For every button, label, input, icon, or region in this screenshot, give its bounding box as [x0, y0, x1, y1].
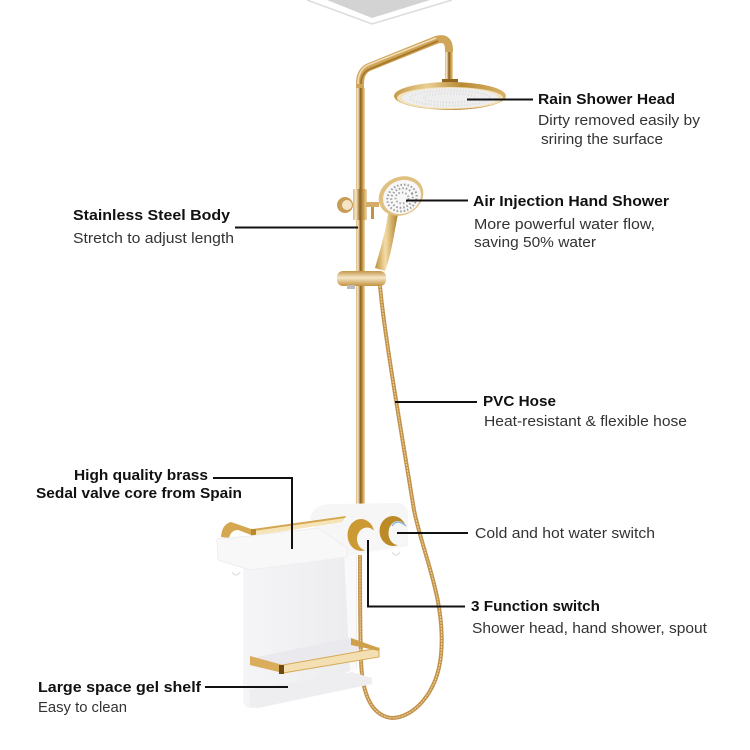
hook details: [232, 552, 400, 575]
white backplate and gel shelf: [243, 552, 372, 708]
valve housing: [310, 503, 408, 558]
callout: air injection hand shower: More powerful water flow,: [474, 216, 655, 233]
hot and cold switches: [348, 516, 408, 551]
callout: rain shower head: sriring the surface: [541, 131, 663, 148]
callout: air injection hand shower: Air Injection Hand Shower: [473, 193, 669, 210]
callout: air injection hand shower: saving 50% water: [474, 234, 596, 251]
callout: PVC hose: Heat-resistant & flexible hose: [484, 413, 687, 430]
air injection hand shower: [372, 169, 430, 271]
callout: cold and hot water switch: Cold and hot water switch: [475, 525, 655, 542]
callout: 3 function switch: 3 Function switch: [471, 598, 600, 615]
upper gold rail: [221, 516, 346, 538]
callout: PVC hose: PVC Hose: [483, 393, 556, 410]
callout: rain shower head: Dirty removed easily by: [538, 112, 701, 129]
decorative ceiling panel: [307, 0, 452, 24]
flexible hose: [360, 286, 442, 718]
callout: PVC hose: [395, 393, 687, 430]
callout: stainless steel body: Stainless Steel Body: [73, 207, 231, 224]
rain shower head: [394, 79, 506, 110]
callout: high quality brass: High quality brass: [74, 467, 208, 484]
callout: large space gel shelf: Easy to clean: [38, 699, 127, 716]
shower riser pipe with top arm: [356, 38, 453, 508]
callout: rain shower head: [467, 91, 701, 148]
callout: air injection hand shower: [406, 193, 669, 251]
hand shower holder: [337, 271, 386, 289]
callout: high quality brass: [36, 467, 292, 549]
callout: rain shower head: Rain Shower Head: [538, 91, 675, 108]
callout: 3 function switch: Shower head, hand shower, spout: [472, 620, 708, 637]
lower gold towel rail: [250, 638, 379, 674]
callout: high quality brass: Sedal valve core from Spain: [36, 485, 242, 502]
callout: 3 function switch: [368, 540, 708, 637]
sliding bracket and wall mount: [337, 189, 379, 220]
callout: large space gel shelf: Large space gel shelf: [38, 679, 202, 696]
callout: stainless steel body: [73, 207, 358, 247]
upper shelf tray: [217, 528, 347, 570]
callout: stainless steel body: Stretch to adjust length: [73, 230, 234, 247]
callout: large space gel shelf: [38, 679, 288, 716]
